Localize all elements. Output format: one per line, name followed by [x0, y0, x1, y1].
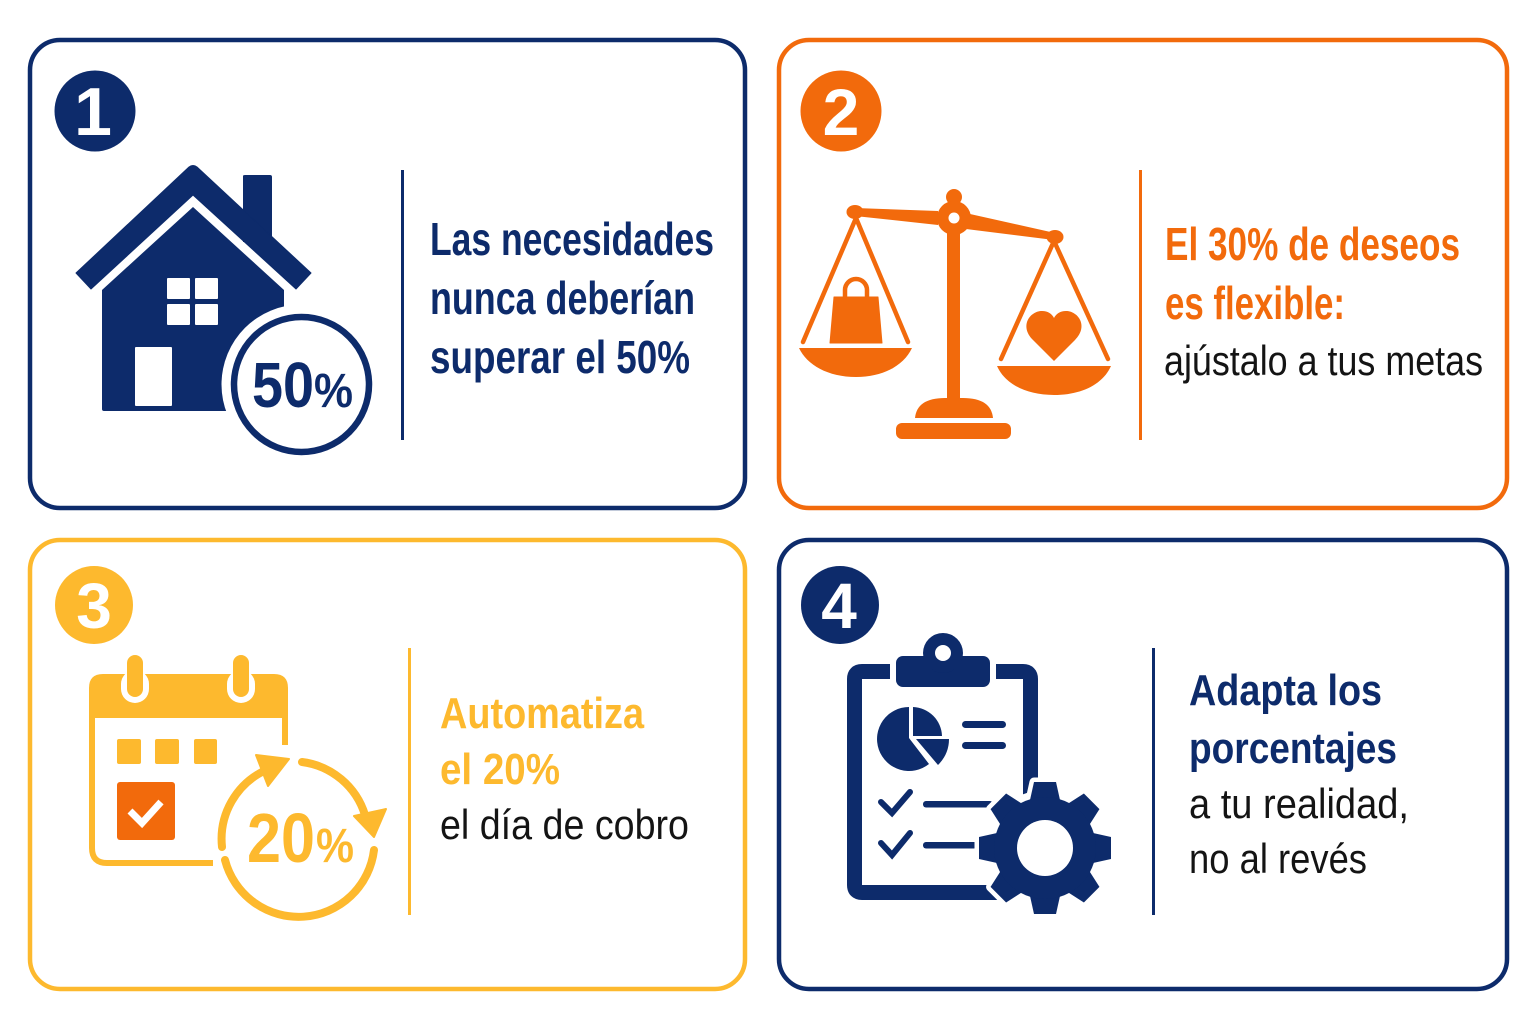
text block 4: Adapta los	[1189, 666, 1382, 715]
icon: calendar with 20%: 20	[247, 799, 315, 877]
text block 1	[430, 213, 714, 383]
icon: calendar with 20%	[89, 655, 386, 917]
icon: balance scale	[799, 189, 1111, 439]
panel 1: necesidades	[30, 40, 745, 508]
text block 2: es flexible:	[1165, 277, 1345, 329]
text block 2	[1164, 218, 1483, 384]
icon: calendar with 20%: %	[316, 820, 354, 873]
icon: house with 50%: 50	[252, 349, 314, 421]
text block 3: el día de cobro	[440, 801, 689, 848]
divider	[1152, 648, 1155, 915]
number badge 1	[54, 70, 136, 152]
text block 3	[440, 689, 689, 848]
panel 2: deseos	[779, 40, 1507, 508]
text block 1: superar el 50%	[430, 331, 690, 383]
number badge 3: 3	[76, 570, 112, 642]
icon: clipboard with gear	[854, 633, 1111, 914]
panel 3: automatiza	[30, 540, 745, 989]
number badge 2	[800, 70, 882, 152]
panel 4: adapta	[779, 540, 1507, 989]
icon: house with 50%	[76, 166, 382, 464]
icon: house with 50%: %	[314, 365, 353, 418]
text block 1: Las necesidades	[430, 213, 714, 265]
text block 1: nunca deberían	[430, 272, 695, 324]
text block 3: Automatiza	[440, 689, 644, 738]
number badge 4	[801, 566, 879, 644]
text block 3: el 20%	[440, 745, 560, 794]
divider	[401, 170, 404, 440]
number badge 2: 2	[823, 75, 859, 149]
number badge 3	[55, 566, 133, 644]
divider	[1139, 170, 1142, 440]
text block 2: ajústalo a tus metas	[1164, 337, 1483, 384]
text block 4: no al revés	[1189, 835, 1367, 882]
divider	[408, 648, 411, 915]
number badge 1: 1	[74, 74, 112, 150]
text block 4	[1189, 666, 1409, 882]
text block 4: porcentajes	[1189, 724, 1397, 773]
number badge 4: 4	[821, 570, 857, 642]
text block 4: a tu realidad,	[1189, 780, 1409, 827]
